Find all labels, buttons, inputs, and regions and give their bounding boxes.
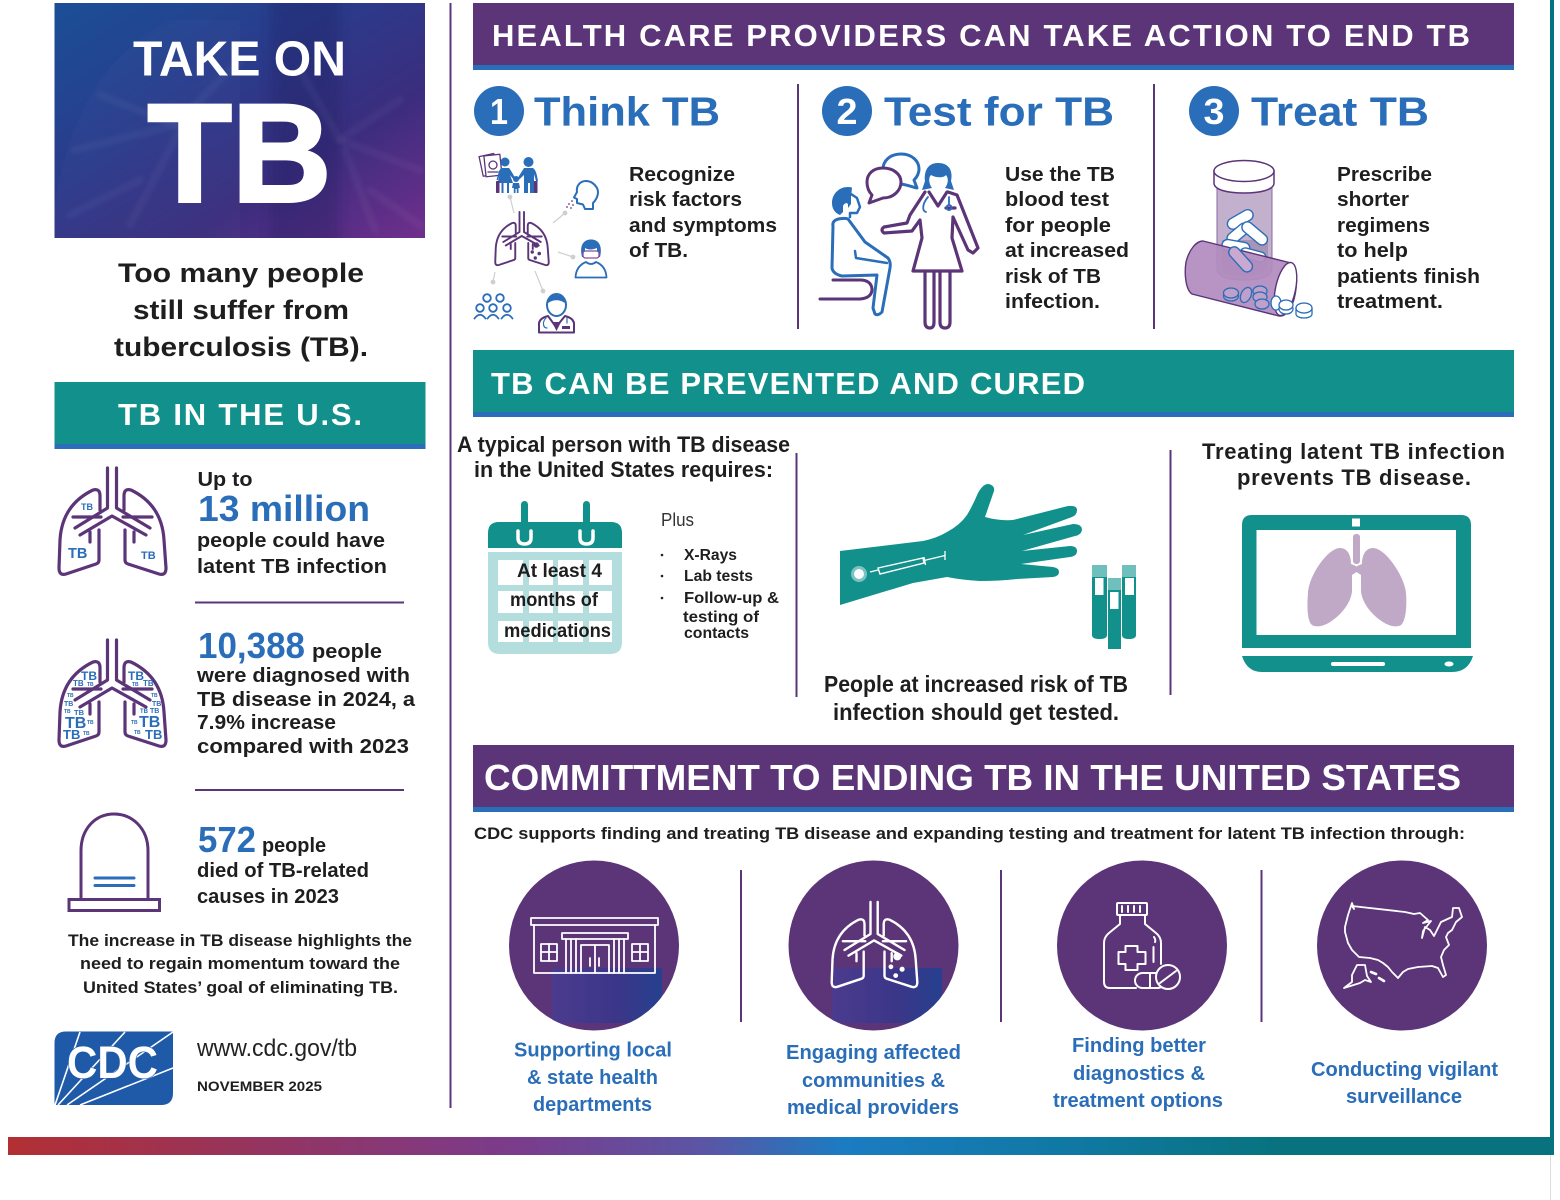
- icon: lungs full of TB labels: TB: [140, 709, 149, 715]
- text: too many people: still suffer from: [133, 295, 349, 325]
- step 3 heading: Treat TB: [1189, 86, 1429, 136]
- icon: tombstone: [69, 814, 160, 910]
- text: plus list: Follow-up &: [684, 590, 779, 607]
- text: treating latent TB: Treating latent TB infection: [1202, 439, 1505, 464]
- text: typical person heading: in the United States requires:: [474, 457, 773, 482]
- step 3 heading: Treat TB: 3: [1204, 91, 1224, 132]
- icon: family with luggage: [496, 157, 538, 193]
- panel: prevented and cured banner: [473, 350, 1514, 417]
- stat: 10,388 people: people: [312, 640, 382, 663]
- label: diagnostics &: [1073, 1063, 1205, 1085]
- icon: central lungs: [495, 212, 549, 265]
- text: treating latent TB: prevents TB disease.: [1237, 465, 1471, 490]
- step 2 heading: Test for TB: [822, 86, 1114, 136]
- text: plus list: testing of: [683, 609, 760, 626]
- step 2 heading: Test for TB: Test for TB: [884, 88, 1114, 134]
- logo: CDC: [54, 1032, 173, 1105]
- text: think TB description: and symptoms: [629, 215, 777, 237]
- label: medical providers: [787, 1097, 959, 1119]
- icon: community group: [474, 294, 512, 318]
- icon: lungs with few TB labels: [59, 468, 166, 574]
- stat: 572 people: causes in 2023: [197, 886, 339, 908]
- text: calendar caption: [504, 561, 611, 642]
- text: plus list: [661, 510, 779, 642]
- text: typical person heading: A typical person with TB disease: [457, 432, 790, 457]
- text: test for TB description: blood test: [1005, 189, 1109, 211]
- panel: prevented and cured banner: TB CAN BE PREVENTED AND CURED: [491, 366, 1085, 401]
- connector lines: [491, 195, 575, 293]
- icon: TB risk factor cluster: [474, 154, 606, 332]
- stat: 572 people: people: [262, 835, 326, 857]
- text: date: NOVEMBER 2025: [197, 1078, 322, 1094]
- text: think TB description: Recognize: [629, 164, 735, 186]
- icon: lungs full of TB labels: TB: [132, 682, 139, 688]
- text: treat TB description: regimens: [1337, 215, 1430, 237]
- text: momentum note: United States’ goal of eliminating TB.: [83, 978, 398, 997]
- logo: CDC: CDC: [67, 1037, 158, 1088]
- text: treat TB description: [1337, 164, 1480, 313]
- text: CDC supports: CDC supports finding and treating TB disease and expanding testing and treatment for latent TB infection through:: [474, 824, 1465, 843]
- icon: lungs full of TB labels: TB: [139, 714, 160, 731]
- icon: lungs with few TB labels: TB: [141, 550, 156, 562]
- stat: 10,388 people: TB disease in 2024, a: [197, 688, 416, 711]
- icon: lungs full of TB labels: TB: [152, 701, 161, 708]
- step 2 heading: Test for TB: 2: [836, 91, 858, 132]
- stat: 10,388 people: 7.9% increase: [197, 711, 336, 734]
- icon: speech bubbles: [867, 154, 919, 203]
- text: test for TB description: at increased: [1005, 240, 1129, 262]
- capsules: [1221, 208, 1270, 263]
- stat: 13 million: people could have: [197, 529, 385, 552]
- text: too many people: Too many people: [118, 258, 364, 288]
- heading: Take On: TAKE ON: [133, 32, 346, 86]
- item: communities and providers: [786, 860, 961, 1119]
- icon: lungs with few TB labels: TB: [81, 502, 93, 512]
- icon: lungs full of TB labels: TB: [74, 708, 85, 717]
- text: too many people: tuberculosis (TB).: [114, 332, 368, 362]
- text: test for TB description: Use the TB: [1005, 164, 1115, 186]
- text: people at increased risk: People at increased risk of TB: [824, 671, 1128, 697]
- icon: arm with syringe: [840, 484, 1082, 605]
- label: [786, 1042, 961, 1119]
- stat: 13 million: latent TB infection: [197, 555, 387, 578]
- icon: lungs full of TB labels: TB: [63, 727, 80, 742]
- item: surveillance: [1311, 860, 1498, 1108]
- icon: building: [531, 918, 658, 973]
- text: calendar caption: At least 4: [517, 561, 602, 582]
- stat: 572 people: [197, 819, 369, 908]
- text: people at increased risk: [824, 671, 1128, 725]
- step 1 heading: Think TB: Think TB: [534, 88, 720, 134]
- stat: 10,388 people: [196, 625, 416, 758]
- label: treatment options: [1053, 1090, 1223, 1112]
- text: plus list: contacts: [684, 625, 749, 642]
- icon: lungs full of TB labels: TB: [131, 720, 138, 726]
- label: [1311, 1059, 1498, 1108]
- panel: TB in the U.S. banner: TB IN THE U.S.: [118, 397, 362, 432]
- icon: lungs full of TB labels: TB: [65, 715, 86, 732]
- icon: laptop with lungs: [1242, 515, 1473, 672]
- icon: lungs full of TB labels: [59, 640, 166, 746]
- text: too many people: [114, 258, 368, 362]
- text: test for TB description: [1005, 164, 1129, 313]
- icon: lungs full of TB labels: TB: [134, 730, 141, 736]
- stat: 572 people: died of TB-related: [197, 860, 369, 882]
- icon: lungs full of TB labels: TB: [143, 679, 154, 688]
- panel: hero Take On TB: [50, 0, 425, 250]
- text: treat TB description: shorter: [1337, 189, 1409, 211]
- icon: lungs full of TB labels: TB: [128, 669, 144, 683]
- text: momentum note: The increase in TB disease highlights the: [68, 931, 412, 950]
- icon: lungs full of TB labels: TB: [145, 727, 162, 742]
- label: Finding better: [1072, 1035, 1206, 1057]
- icon: lungs full of TB labels: TB: [87, 682, 94, 688]
- icon: pill bottles: [1185, 160, 1312, 318]
- text: think TB description: of TB.: [629, 240, 688, 262]
- icon: patient and doctor consultation: [820, 154, 978, 328]
- step 1 heading: Think TB: [474, 86, 720, 136]
- tablets: [1224, 286, 1269, 309]
- step 1 heading: Think TB: 1: [490, 91, 508, 132]
- panel: commitment banner: [473, 745, 1514, 812]
- text: think TB description: risk factors: [629, 189, 742, 211]
- text: think TB description: [629, 164, 777, 262]
- text: plus list: Lab tests: [684, 568, 753, 585]
- icon: US map: [1344, 903, 1462, 988]
- panel: commitment banner: COMMITTMENT TO ENDING TB IN THE UNITED STATES: [484, 757, 1461, 798]
- icon: medication calendar: [488, 504, 622, 654]
- text: typical person heading: [457, 432, 790, 482]
- label: Conducting vigilant: [1311, 1059, 1498, 1081]
- text: treat TB description: treatment.: [1337, 291, 1443, 313]
- item: diagnostics and treatment: [1053, 860, 1227, 1112]
- stat: 572 people: 572: [198, 819, 256, 860]
- text: treat TB description: patients finish: [1337, 266, 1480, 288]
- icon: lungs full of TB labels: TB: [150, 708, 159, 715]
- label: [1053, 1035, 1223, 1112]
- icon: passports: [479, 154, 502, 177]
- panel: TB in the U.S. banner: [54, 382, 426, 449]
- text: test for TB description: for people: [1005, 215, 1111, 237]
- icon: lungs full of TB labels: TB: [81, 669, 97, 683]
- icon: luggage: [496, 181, 538, 193]
- label: Supporting local: [514, 1040, 672, 1062]
- icon: lungs full of TB labels: TB: [87, 720, 94, 726]
- icon: lungs full of TB labels: TB: [64, 701, 73, 708]
- icon: lungs full of TB labels: TB: [67, 693, 74, 699]
- label: surveillance: [1346, 1086, 1462, 1108]
- icon: doctor: [539, 294, 574, 332]
- icon: masked person: [576, 240, 606, 278]
- text: test for TB description: risk of TB: [1005, 266, 1101, 288]
- heading: TB: TB: [148, 74, 332, 232]
- icon: lungs full of TB labels: TB: [64, 709, 71, 715]
- label: & state health: [527, 1067, 658, 1089]
- step 3 heading: Treat TB: Treat TB: [1251, 88, 1429, 134]
- icon: lungs with few TB labels: TB: [68, 546, 87, 562]
- label: communities &: [802, 1070, 945, 1092]
- stat: 10,388 people: were diagnosed with: [196, 664, 410, 687]
- text: plus list: Plus: [661, 510, 694, 530]
- icon: blood test tubes: [1092, 565, 1136, 649]
- text: test for TB description: infection.: [1005, 291, 1100, 313]
- icon: medicine bottle: [1104, 903, 1180, 989]
- text: calendar caption: medications: [504, 621, 611, 642]
- label: [514, 1040, 672, 1116]
- label: Engaging affected: [786, 1042, 961, 1064]
- icon: lungs full of TB labels: TB: [151, 693, 158, 699]
- text: momentum note: [68, 931, 412, 997]
- stat: 10,388 people: compared with 2023: [197, 735, 409, 758]
- lungs: [1307, 534, 1406, 626]
- panel: providers banner: HEALTH CARE PROVIDERS CAN TAKE ACTION TO END TB: [492, 18, 1470, 53]
- label: departments: [533, 1094, 652, 1116]
- icon: lungs full of TB labels: TB: [83, 731, 90, 737]
- item: health departments: [509, 860, 679, 1116]
- stat: 13 million: 13 million: [198, 488, 370, 529]
- text: treat TB description: to help: [1337, 240, 1408, 262]
- icon: lungs full of TB labels: TB: [73, 679, 84, 688]
- stat: 13 million: Up to: [198, 469, 252, 491]
- text: plus list: X-Rays: [684, 547, 737, 564]
- stat: 13 million: [197, 469, 387, 578]
- text: treating latent TB: [1202, 439, 1505, 490]
- icon: patient: [832, 187, 890, 315]
- text: calendar caption: months of: [510, 590, 599, 611]
- icon: doctor: [882, 163, 978, 328]
- text: momentum note: need to regain momentum toward the: [80, 954, 400, 973]
- icon: white lungs: [832, 902, 917, 987]
- stat: 10,388 people: 10,388: [198, 625, 305, 666]
- text: treat TB description: Prescribe: [1337, 164, 1432, 186]
- text: website: www.cdc.gov/tb: [196, 1035, 357, 1062]
- text: people at increased risk: infection should get tested.: [833, 699, 1119, 725]
- panel: providers banner: [473, 3, 1514, 70]
- icon: coughing head: [566, 181, 598, 209]
